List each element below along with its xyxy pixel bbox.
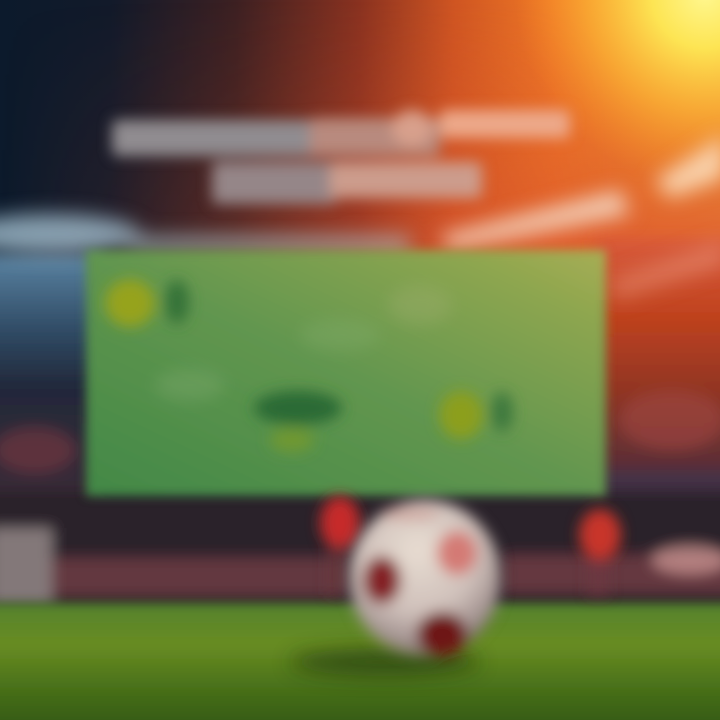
icon: yellow flag lower-right [439, 391, 513, 439]
icon: yellow flag top-left [105, 279, 189, 327]
panel: green pitch board [86, 250, 606, 496]
pale highlight patches on the board [155, 285, 452, 401]
background: pale cloud bands [0, 135, 720, 300]
title block (illegible blurred heading) [112, 110, 570, 204]
ball shadow [290, 648, 480, 676]
players in red [320, 496, 621, 596]
background: stadium stands [0, 240, 720, 610]
background: sunset sky [40, 0, 720, 258]
grass foreground [0, 603, 720, 720]
icon: dark and yellow team mark, centre [254, 391, 342, 452]
icon: soccer ball [349, 500, 501, 656]
